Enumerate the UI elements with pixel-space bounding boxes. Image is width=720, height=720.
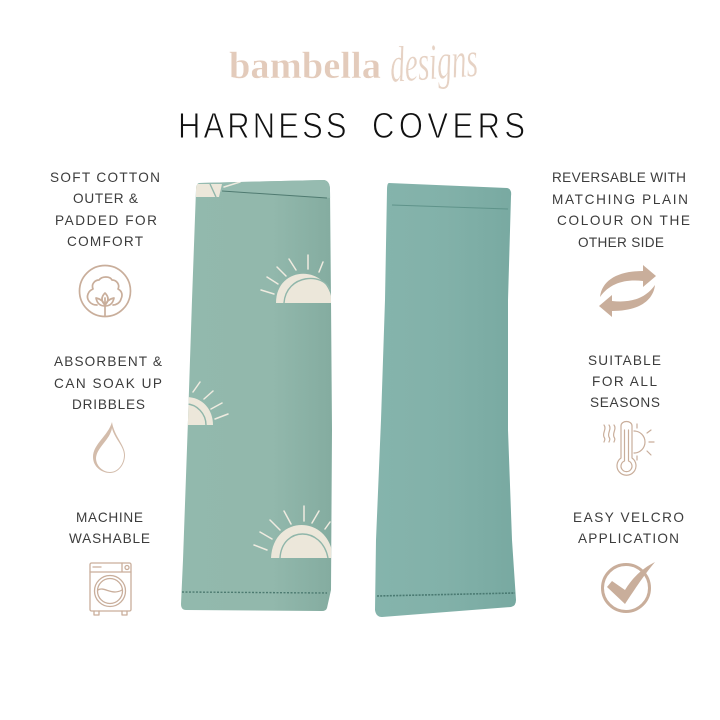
- text: reversible: MATCHING PLAIN: [552, 192, 688, 207]
- product: plain harness cover: [375, 183, 516, 617]
- bottom hem stitching: [182, 592, 327, 593]
- text: machine washable: WASHABLE: [69, 531, 150, 546]
- text: absorbent: [54, 354, 162, 412]
- sun motif: bottom right: [254, 506, 333, 558]
- text: absorbent: ABSORBENT &: [54, 354, 162, 369]
- right column: reversible feature: [552, 170, 690, 317]
- text: absorbent: DRIBBLES: [72, 397, 145, 412]
- top hem: [196, 180, 332, 198]
- text: reversible: COLOUR ON THE: [557, 213, 690, 228]
- right column: velcro feature: [573, 510, 684, 612]
- left column: soft cotton feature: [50, 170, 160, 316]
- text: reversible: OTHER SIDE: [578, 235, 664, 250]
- title: HARNESS: [178, 107, 347, 147]
- text: soft cotton: [50, 170, 160, 249]
- text: seasons: SUITABLE: [588, 353, 661, 368]
- right column: all seasons feature: [588, 353, 661, 475]
- text: seasons: SEASONS: [590, 395, 660, 410]
- text: reversible: [552, 170, 690, 250]
- text: velcro: EASY VELCRO: [573, 510, 684, 525]
- text: absorbent: CAN SOAK UP: [54, 376, 162, 391]
- bottom hem stitching: [377, 593, 515, 596]
- text: velcro: [573, 510, 684, 546]
- text: soft cotton: COMFORT: [67, 234, 143, 249]
- sun motif: upper right: [261, 255, 332, 303]
- logo: bambella designs: designs: [388, 32, 480, 94]
- icon: washing machine: [90, 563, 131, 615]
- text: reversible: REVERSABLE WITH: [552, 170, 686, 185]
- sun motif: top corner: [196, 182, 240, 197]
- title: COVERS: [372, 107, 525, 147]
- icon: water drop: [93, 422, 125, 473]
- text: machine washable: MACHINE: [76, 510, 143, 525]
- sun motif: left edge: [186, 382, 228, 425]
- icon: check mark: [602, 562, 655, 612]
- top hem stitching: [392, 205, 508, 209]
- product: patterned harness cover: [181, 180, 333, 611]
- text: soft cotton: OUTER &: [73, 191, 138, 206]
- logo: bambella designs: bambella: [229, 45, 381, 87]
- logo: bambella designs: [229, 32, 480, 94]
- text: soft cotton: PADDED FOR: [55, 213, 157, 228]
- text: seasons: FOR ALL: [592, 374, 657, 389]
- infographic canvas: [50, 46, 690, 617]
- title: [178, 107, 525, 147]
- left column: absorbent feature: [54, 354, 162, 473]
- text: seasons: [588, 353, 661, 410]
- text: machine washable: [69, 510, 150, 546]
- icon: reverse arrows: [599, 265, 656, 317]
- icon: cotton flower: [80, 266, 130, 316]
- text: velcro: APPLICATION: [578, 531, 679, 546]
- left column: machine washable feature: [69, 510, 150, 615]
- text: soft cotton: SOFT COTTON: [50, 170, 160, 185]
- icon: thermometer and sun: [604, 422, 654, 475]
